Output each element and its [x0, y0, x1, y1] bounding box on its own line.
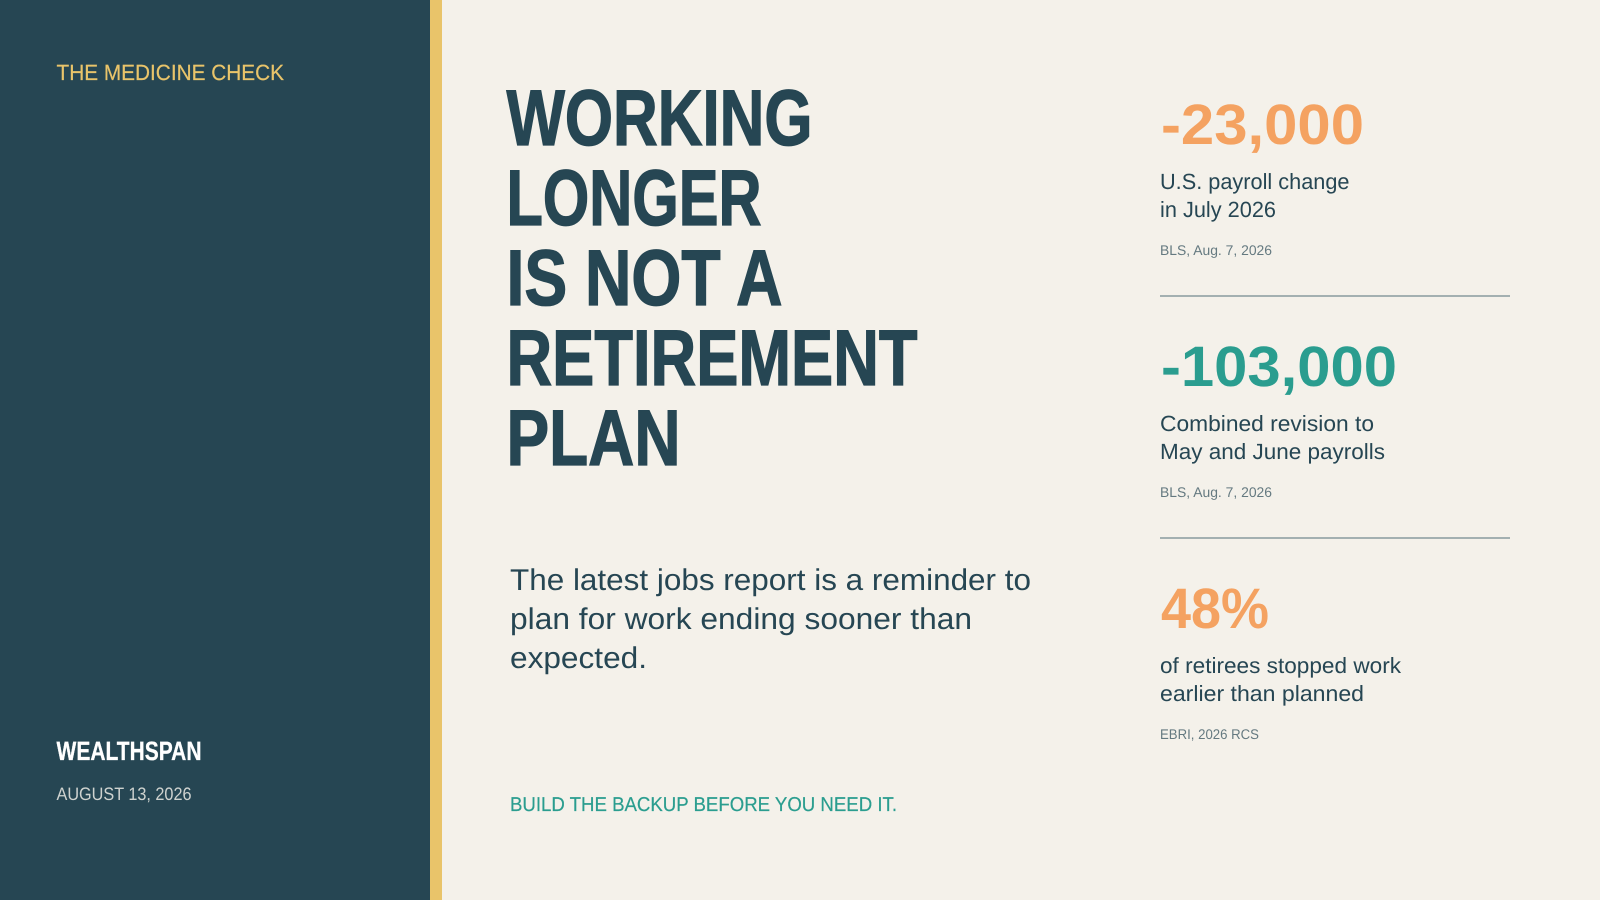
accent stripe: [430, 0, 442, 900]
headline: RETIREMENT: [506, 313, 918, 402]
stat: payroll revision: Combined revision to: [1160, 411, 1374, 436]
headline: IS NOT A: [506, 233, 782, 322]
publication date: AUGUST 13, 2026: [56, 784, 192, 804]
stat: payroll revision: BLS, Aug. 7, 2026: [1160, 484, 1272, 500]
stat: early retirees: earlier than planned: [1160, 681, 1364, 706]
stat: early retirees: EBRI, 2026 RCS: [1160, 726, 1259, 742]
brand name: WEALTHSPAN: [56, 736, 202, 766]
body paragraph: [510, 564, 1031, 675]
stat: payroll change: U.S. payroll change: [1160, 169, 1350, 194]
headline: LONGER: [506, 153, 762, 242]
stat: early retirees: [1160, 577, 1402, 742]
stat: payroll change: in July 2026: [1160, 197, 1276, 222]
panel: left sidebar: [0, 0, 430, 900]
headline: WORKING: [506, 73, 812, 162]
stat: payroll revision: May and June payrolls: [1160, 439, 1385, 464]
stat: payroll change: BLS, Aug. 7, 2026: [1160, 242, 1272, 258]
body paragraph: expected.: [510, 642, 647, 675]
stat: early retirees: of retirees stopped work: [1160, 653, 1402, 678]
stat: payroll revision: [1160, 335, 1397, 500]
stat: early retirees: 48%: [1161, 577, 1269, 641]
stat: payroll change: -23,000: [1161, 93, 1364, 157]
body paragraph: plan for work ending sooner than: [510, 603, 972, 636]
stat: payroll revision: -103,000: [1161, 335, 1397, 399]
body paragraph: The latest jobs report is a reminder to: [510, 564, 1031, 597]
series label: THE MEDICINE CHECK: [56, 60, 284, 85]
stat: payroll change: [1160, 93, 1364, 258]
call to action: BUILD THE BACKUP BEFORE YOU NEED IT.: [510, 794, 897, 816]
headline: PLAN: [506, 393, 680, 482]
headline: [506, 73, 918, 482]
